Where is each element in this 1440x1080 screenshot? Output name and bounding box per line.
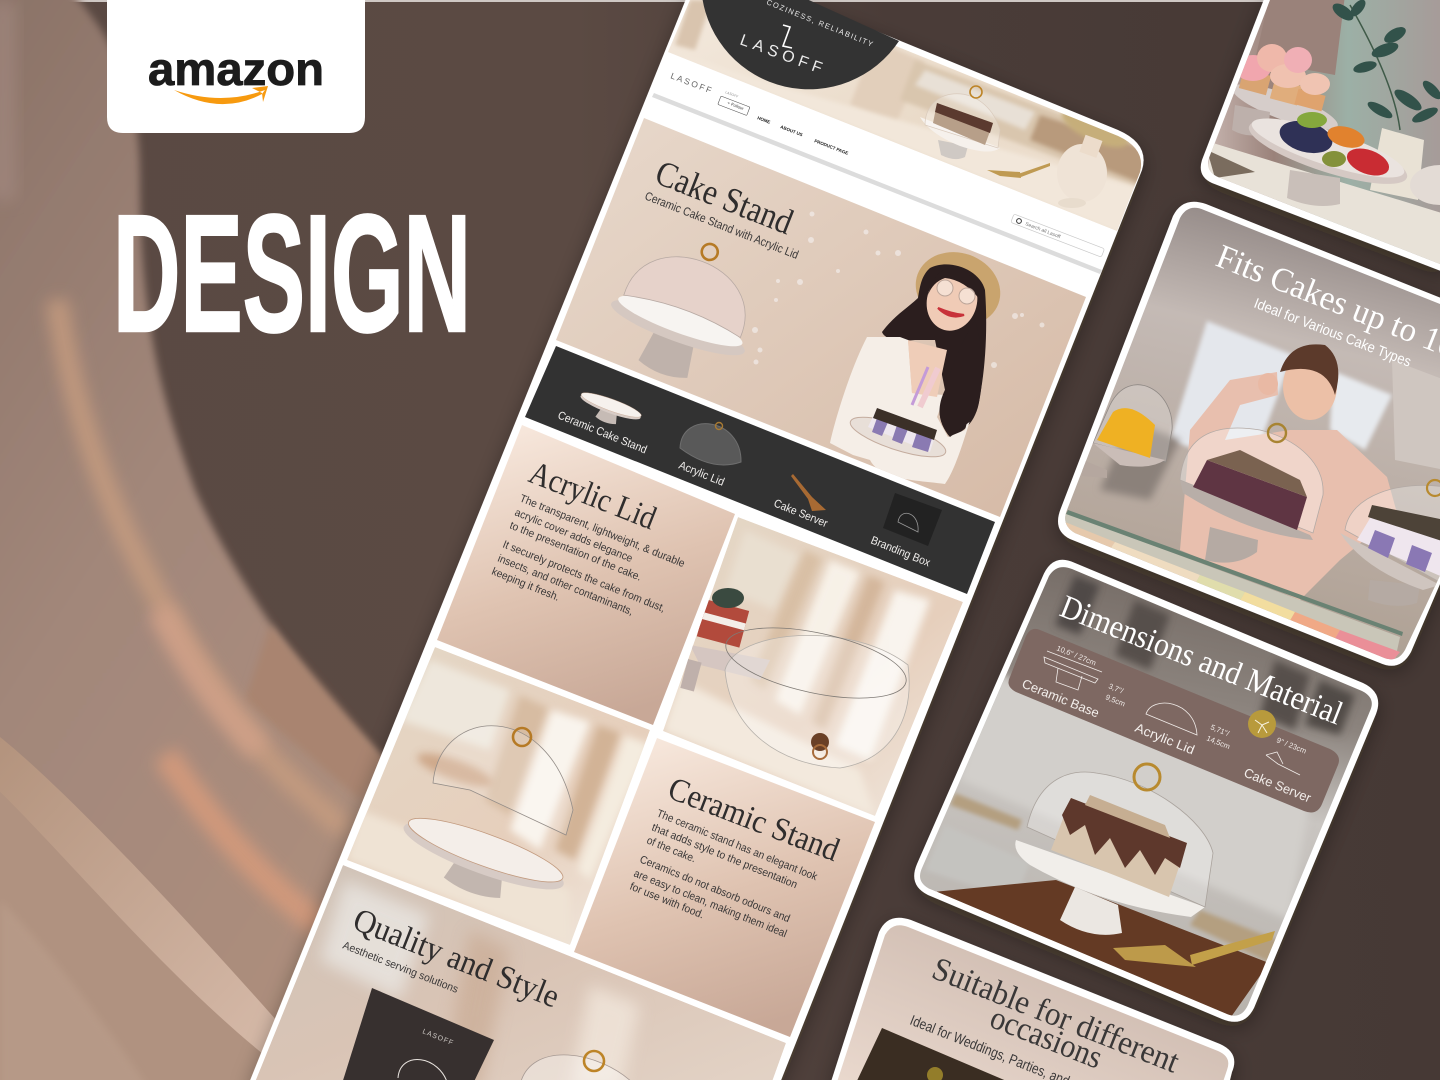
dimensions panel: Cake Server: [1242, 765, 1314, 806]
panel: Ceramic Stand: for use with food.: [628, 881, 706, 921]
card: cupcakes and fruit stand: [1200, 0, 1440, 274]
store navigation bar: + Follow: [727, 100, 745, 111]
panel: Acrylic Lid: to the presentation of the cake.: [508, 520, 643, 584]
cake server: [987, 163, 1050, 178]
hat: [916, 252, 1000, 319]
product: cake stand with lid: [611, 242, 746, 378]
item: cake server: [772, 474, 829, 530]
branding box: [340, 988, 494, 1080]
panel: Ceramic Stand: Ceramic Stand: [663, 771, 845, 869]
dimensions panel: 9,5cm: [1104, 693, 1127, 709]
vase: [1058, 113, 1129, 208]
item: cake server: Cake Server: [772, 498, 829, 530]
photo: stand and dome lid: [347, 647, 650, 945]
panel: components band: [525, 346, 995, 594]
panel: Acrylic Lid: It securely protects the cake from dust,: [501, 539, 667, 615]
panel: Ceramic Stand: are easy to clean, making them ideal: [632, 868, 788, 940]
panel: Acrylic Lid: insects, and other contaminants,: [496, 553, 635, 618]
store navigation bar: PRODUCT PAGE: [814, 138, 849, 156]
item: branding box: [869, 493, 942, 569]
dimensions panel: [1008, 629, 1339, 812]
panel: Ceramic Stand: The ceramic stand has an elegant look: [655, 808, 819, 883]
card: Suitable for different occasions: [829, 918, 1234, 1080]
store navigation bar: Search all Lasoff: [1024, 221, 1062, 240]
gold cake server: [1113, 945, 1196, 967]
card: Fits Cakes up to 10: Ideal for Various Cake Types: [1252, 296, 1413, 371]
fruit plate: [1249, 112, 1408, 206]
logo card: amazon: amazon: [148, 43, 324, 95]
brand circle: LASOFF: LASOFF: [738, 32, 824, 77]
dimensions panel: 9" / 23cm: [1275, 736, 1308, 756]
main mockup board: [247, 0, 1170, 1080]
wooden board: [928, 880, 1269, 1017]
plate and cake: [850, 416, 946, 458]
panel: hero Cake Stand: [556, 118, 1086, 517]
hair right waves: [940, 378, 982, 437]
panel: Ceramic Stand: Ceramics do not absorb odours and: [638, 854, 792, 925]
title: DESIGN: DESIGN: [113, 181, 471, 367]
item: acrylic lid: Acrylic Lid: [677, 460, 726, 489]
red velvet cake: [680, 588, 770, 692]
candles: [912, 367, 928, 405]
cupcakes: [1228, 44, 1342, 138]
panel: Ceramic Stand: that adds style to the presentation: [650, 822, 799, 891]
panel: Acrylic Lid: acrylic cover adds elegance: [513, 507, 634, 565]
glass bowl: [725, 635, 909, 768]
icon: lid outline: [1146, 703, 1197, 735]
panel: Quality and Style: [255, 865, 786, 1080]
panel: Quality and Style: Quality and Style: [348, 902, 564, 1015]
panel: Quality and Style: Aesthetic serving solutions: [341, 940, 460, 996]
store navigation bar: HOME: [757, 115, 771, 125]
item: ceramic cake stand: [556, 389, 648, 456]
card: Dimensions and Material: [900, 550, 1390, 1030]
card: Dimensions and Material: Dimensions and Material: [1055, 589, 1347, 732]
dimensions panel: 3,7"/: [1107, 682, 1126, 696]
display counter and macarons: [1056, 510, 1403, 664]
cake on stand: [920, 86, 1000, 159]
woman with birthday cake: [830, 252, 1000, 484]
dimensions panel: Acrylic Lid: [1133, 720, 1197, 757]
event photo: [855, 1028, 1016, 1080]
cake under dome: [1015, 764, 1213, 935]
eucalyptus plant: [1330, 0, 1440, 130]
item: branding box: Branding Box: [869, 535, 932, 569]
store navigation bar: [652, 71, 1105, 274]
panel: Acrylic Lid: Acrylic Lid: [524, 455, 661, 537]
panel: Acrylic Lid: The transparent, lightweight, & durable: [518, 493, 686, 570]
panel: Acrylic Lid: keeping it fresh.: [490, 566, 561, 604]
item: acrylic lid: [677, 422, 741, 489]
heading: Cake Stand: Cake Stand: [650, 152, 799, 242]
stand lid: [520, 1055, 635, 1080]
panel: Ceramic Stand: of the cake.: [645, 835, 698, 865]
panel: Quality and Style: LASOFF: [421, 1028, 455, 1047]
store navigation bar: LASOFF: [725, 90, 739, 99]
dimensions panel: 14,5cm: [1205, 734, 1231, 751]
logo card: amazon: [107, 0, 365, 133]
store navigation bar: ABOUT US: [780, 124, 803, 137]
item: ceramic cake stand: Ceramic Cake Stand: [556, 410, 648, 456]
panel: Acrylic Lid: [437, 425, 735, 725]
woman in pink shirt: [1180, 344, 1397, 600]
yellow cake under dome: [1082, 385, 1172, 478]
photo: acrylic bowl on table: [663, 517, 963, 816]
dimensions panel: 10,6" / 27cm: [1055, 644, 1097, 668]
panel: Ceramic Stand: [574, 738, 875, 1037]
chocolate cake under dome: [1180, 424, 1323, 563]
board background: [247, 0, 1144, 1080]
skin: [908, 340, 947, 397]
blouse: [830, 337, 982, 484]
brand circle: LASOFF: [702, 0, 899, 89]
store navigation bar: LASOFF: [669, 71, 713, 95]
card: Suitable for different occasions: occasions: [985, 1000, 1107, 1076]
dimensions panel: 5,71"/: [1209, 723, 1231, 738]
header banner photo: [668, 0, 1142, 231]
card: Fits Cakes up to 10: [1050, 190, 1440, 670]
lavender cake under dome: [1340, 480, 1440, 606]
dimensions panel: Ceramic Base: [1020, 676, 1102, 720]
confetti: [752, 212, 1044, 368]
hair back: [882, 264, 986, 437]
icon: base outline: [1044, 657, 1098, 690]
face: [926, 278, 978, 331]
subheading: Ceramic Cake Stand with Acrylic Lid: Ceramic Cake Stand with Acrylic Lid: [643, 189, 801, 262]
icon: gift bow badge: [1248, 710, 1276, 738]
